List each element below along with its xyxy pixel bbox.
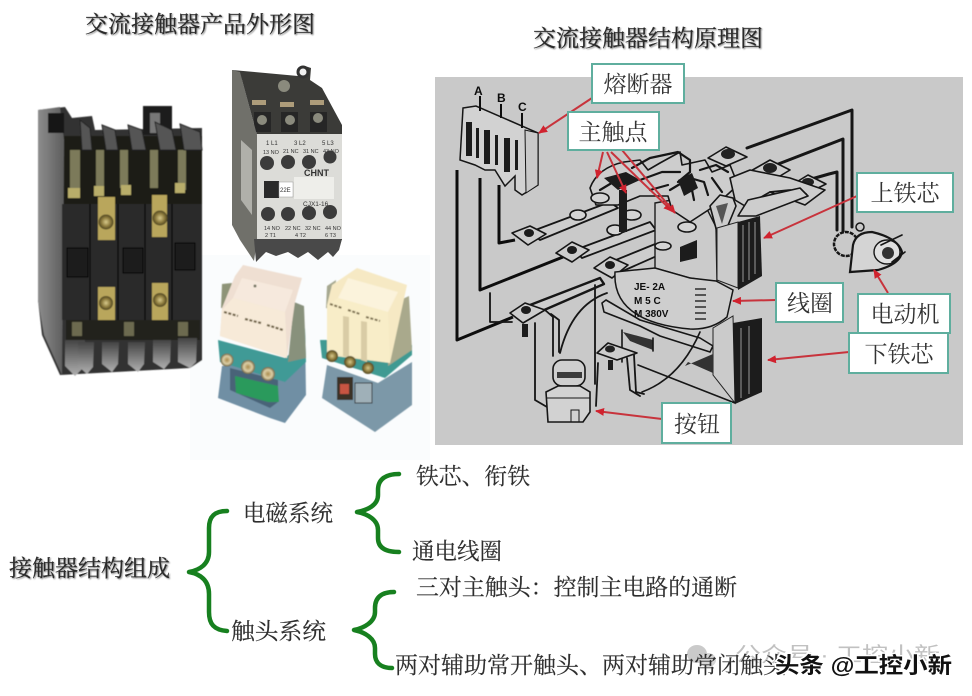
arrows: main contacts [597, 150, 675, 213]
brace: contact system [354, 592, 394, 668]
screws [326, 350, 374, 374]
title: product appearance: 交流接触器产品外形图 [85, 12, 315, 37]
photo: CHNT auxiliary contactor: 2 T1 [265, 233, 276, 239]
fork [710, 195, 736, 236]
windows [67, 243, 195, 277]
arm bars [730, 170, 825, 206]
wires to button [535, 285, 607, 407]
indicator windows [337, 377, 353, 400]
coil: M 5 C [634, 296, 661, 307]
schematic line art [457, 84, 905, 422]
label: upper iron core [857, 173, 953, 212]
top power wires [747, 110, 852, 233]
phase letters: B [497, 91, 506, 105]
text: energised coil: 通电线圈 [412, 539, 502, 564]
label: button: 按钮 [674, 412, 720, 437]
wires lower left [457, 170, 513, 340]
text: three main contacts: 三对主触头：控制主电路的通断 [416, 575, 737, 600]
photo backdrop tint [190, 255, 430, 460]
arrow: fuse [539, 98, 592, 133]
photo: CHNT auxiliary contactor: 13 NO [263, 150, 280, 156]
photo: CHNT auxiliary contactor: CHNT [304, 168, 329, 178]
top terminals [708, 147, 747, 166]
cream cap [220, 265, 302, 358]
watermark: wechat account [687, 644, 940, 667]
text: iron core and armature: 铁芯、衔铁 [416, 464, 530, 489]
photo: cream contactor left [218, 265, 306, 423]
arrow: lower core [768, 352, 849, 360]
brass terminals [98, 195, 168, 320]
label: lower iron core: 下铁芯 [864, 342, 934, 367]
label: upper iron core: 上铁芯 [870, 181, 940, 206]
terminals [510, 226, 628, 337]
bottom feet [254, 239, 342, 262]
dark top [232, 66, 342, 240]
title: structure diagram: 交流接触器结构原理图 [533, 26, 763, 51]
photo: CHNT auxiliary contactor: 43 NO [323, 149, 340, 155]
panel: structure diagram [435, 64, 963, 445]
coil [615, 268, 733, 329]
contact studs [570, 193, 696, 250]
lower finger tabs [65, 338, 197, 376]
blue base [218, 330, 306, 423]
lower terminals [66, 320, 200, 340]
blue base [322, 362, 412, 432]
green coil [235, 376, 279, 402]
coil: JE- 2A [634, 282, 665, 293]
white face [257, 134, 342, 239]
side panel [38, 107, 64, 375]
photo: CHNT auxiliary contactor: 44 NO [325, 226, 342, 232]
side panel [232, 70, 257, 261]
lower iron core [622, 316, 762, 404]
label: motor [858, 294, 950, 333]
side terminals [388, 296, 412, 366]
phase letters: A [474, 84, 483, 98]
photo: CHNT auxiliary contactor: 14 NO [264, 226, 281, 232]
photo: CHNT auxiliary contactor: 22 NC [285, 226, 301, 232]
upper iron core [717, 216, 762, 290]
label: fuse [592, 64, 684, 103]
arrow: button [596, 411, 662, 419]
photo: CHNT auxiliary contactor [232, 66, 342, 262]
brace: root [189, 511, 227, 631]
photo: CHNT auxiliary contactor: 32 NC [305, 226, 321, 232]
label: main contacts [568, 112, 659, 150]
top fingers [80, 120, 202, 150]
text: electromagnetic system: 电磁系统 [243, 501, 333, 526]
teal band [218, 328, 306, 382]
screws [220, 354, 275, 381]
phase letters: C [518, 100, 527, 114]
central core face [655, 195, 717, 282]
text: root heading: 接触器结构组成 [9, 556, 170, 581]
base opening [230, 368, 278, 408]
photo: cream contactor right [320, 268, 412, 432]
photo: black contactor [38, 106, 202, 376]
phase letters [474, 84, 527, 114]
label: button [662, 403, 731, 443]
label: coil [776, 283, 843, 322]
contact bars [530, 202, 618, 240]
main contact assembly [570, 147, 826, 250]
photo: CHNT auxiliary contactor: CJX1-16 [303, 201, 329, 208]
photo: CHNT auxiliary contactor: 21 NC [283, 149, 299, 155]
label: lower iron core [849, 333, 948, 373]
photo: CHNT auxiliary contactor: 22E [280, 188, 291, 194]
photo: CHNT auxiliary contactor: 4 T2 [295, 233, 306, 239]
coil: M 380V [634, 309, 669, 320]
cream cap [327, 268, 407, 363]
fuse block [460, 96, 538, 195]
coil platform [602, 300, 713, 352]
text: contact system: 触头系统 [231, 619, 326, 644]
label: motor: 电动机 [870, 302, 940, 327]
label: coil: 线圈 [787, 291, 833, 316]
photo: CHNT auxiliary contactor: 1 L1 [266, 141, 278, 147]
label: main contacts: 主触点 [578, 120, 648, 145]
brace: electromagnetic system [357, 474, 399, 552]
watermark: wechat account: 公众号 · 工控小新 [735, 644, 940, 667]
upper terminals area [64, 136, 202, 204]
motor [834, 223, 905, 272]
arrow: coil [733, 300, 776, 301]
label: fuse: 熔断器 [604, 72, 672, 97]
middle body [62, 204, 202, 320]
push button [546, 360, 590, 422]
teal band [320, 340, 412, 378]
button terminal [597, 343, 637, 360]
text: auxiliary contacts: 两对辅助常开触头、两对辅助常闭触头 [395, 653, 787, 678]
photo: CHNT auxiliary contactor: 3 L2 [294, 141, 306, 147]
photo: CHNT auxiliary contactor: 5 L3 [322, 141, 334, 147]
arrow: upper core [764, 196, 857, 238]
photo: CHNT auxiliary contactor: 6 T3 [325, 233, 336, 239]
arrow: motor [874, 270, 888, 293]
photo: CHNT auxiliary contactor: 31 NC [303, 149, 319, 155]
side terminals [288, 302, 306, 362]
watermark: toutiao account: 头条 @工控小新 [775, 653, 952, 678]
